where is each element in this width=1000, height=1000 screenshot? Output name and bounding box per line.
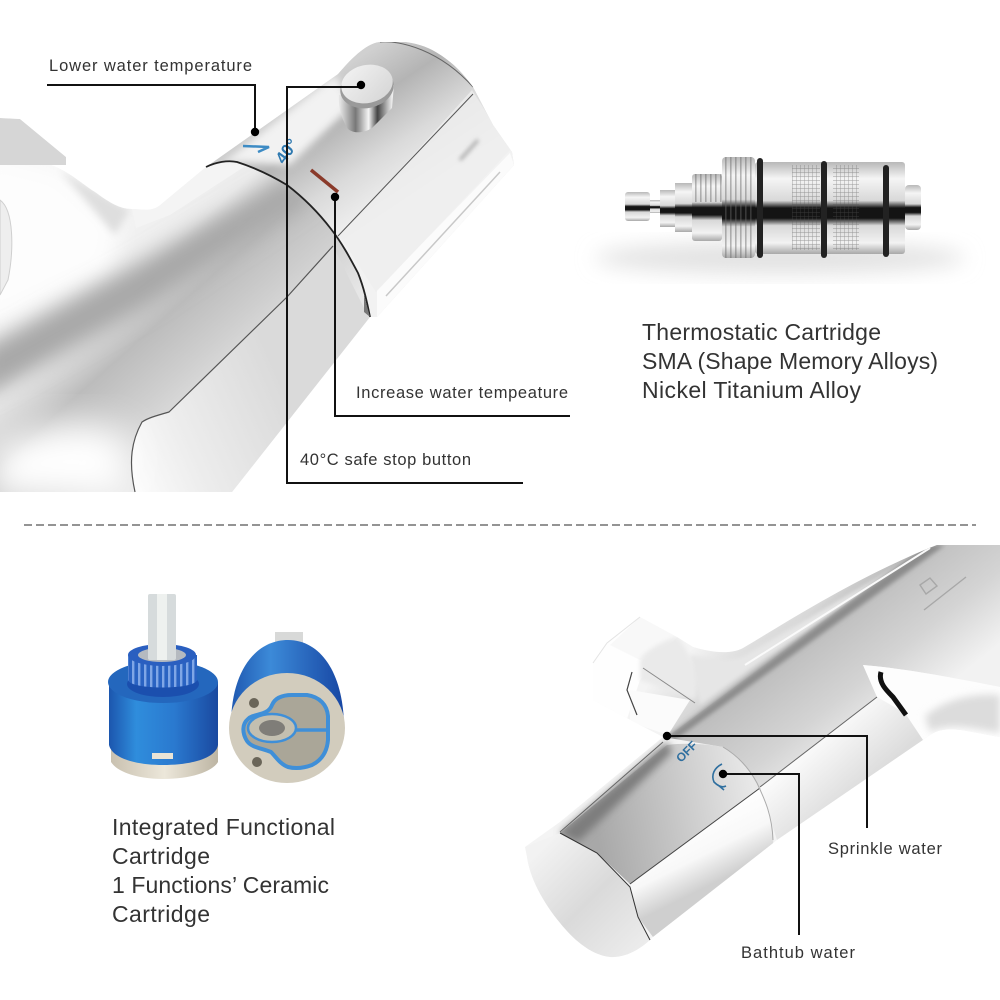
dial head bbox=[560, 744, 760, 884]
dashed divider bbox=[24, 524, 976, 526]
text: integrated cartridge description bbox=[112, 814, 335, 927]
icon: shower mode bbox=[713, 764, 726, 790]
neck and arm top bbox=[658, 554, 914, 734]
OFF dial marking: OFF bbox=[673, 738, 700, 765]
40 degree dial marking: 40° bbox=[272, 135, 302, 167]
callout: bathtub water: Bathtub water bbox=[741, 944, 856, 962]
callout: increase water temperature bbox=[331, 193, 570, 416]
nut bbox=[593, 624, 639, 718]
text: thermostatic cartridge description: Nickel Titanium Alloy bbox=[642, 377, 862, 403]
ceramic cartridge photo bbox=[108, 594, 345, 783]
cartridge right: face view bbox=[229, 632, 345, 783]
text: integrated cartridge description: Integrated Functional bbox=[112, 814, 335, 840]
icon: cold mark blue bbox=[243, 146, 269, 152]
text: integrated cartridge description: Cartridge bbox=[112, 901, 210, 927]
callout: sprinkle water bbox=[663, 732, 942, 858]
icon: hot mark red bbox=[311, 170, 338, 192]
dial grip bbox=[630, 788, 773, 937]
icon: brand logo mark bbox=[920, 577, 966, 610]
head dial bbox=[206, 42, 514, 317]
top faucet photo bbox=[0, 40, 520, 500]
icon: hose behind arm bbox=[880, 672, 906, 715]
lower body panel bbox=[131, 246, 370, 498]
icon: stop button knob bbox=[336, 60, 398, 132]
callout: sprinkle water: Sprinkle water bbox=[828, 840, 942, 858]
cartridge left: side view bbox=[108, 594, 218, 779]
thermostatic cartridge photo bbox=[595, 157, 965, 274]
outer strip bbox=[667, 738, 722, 747]
text: thermostatic cartridge description: Thermostatic Cartridge bbox=[642, 319, 881, 345]
text: integrated cartridge description: Cartridge bbox=[112, 843, 210, 869]
callout: lower water temperature: Lower water temperature bbox=[49, 57, 252, 75]
text: thermostatic cartridge description: SMA (Shape Memory Alloys) bbox=[642, 348, 938, 374]
callout: 40C safe stop button: 40°C safe stop button bbox=[300, 451, 471, 469]
callout: increase water temperature: Increase water tempeature bbox=[356, 384, 568, 402]
text: thermostatic cartridge description bbox=[642, 319, 938, 403]
tube and arm bbox=[667, 545, 1000, 787]
cap face bbox=[525, 833, 650, 957]
text: integrated cartridge description: 1 Functions’ Ceramic bbox=[112, 872, 329, 898]
callout: 40C safe stop button bbox=[287, 81, 523, 483]
callout: lower water temperature bbox=[47, 57, 259, 136]
callout: bathtub water bbox=[719, 770, 856, 962]
cartridge shadow bbox=[595, 242, 965, 274]
bottom faucet photo bbox=[510, 540, 1000, 970]
